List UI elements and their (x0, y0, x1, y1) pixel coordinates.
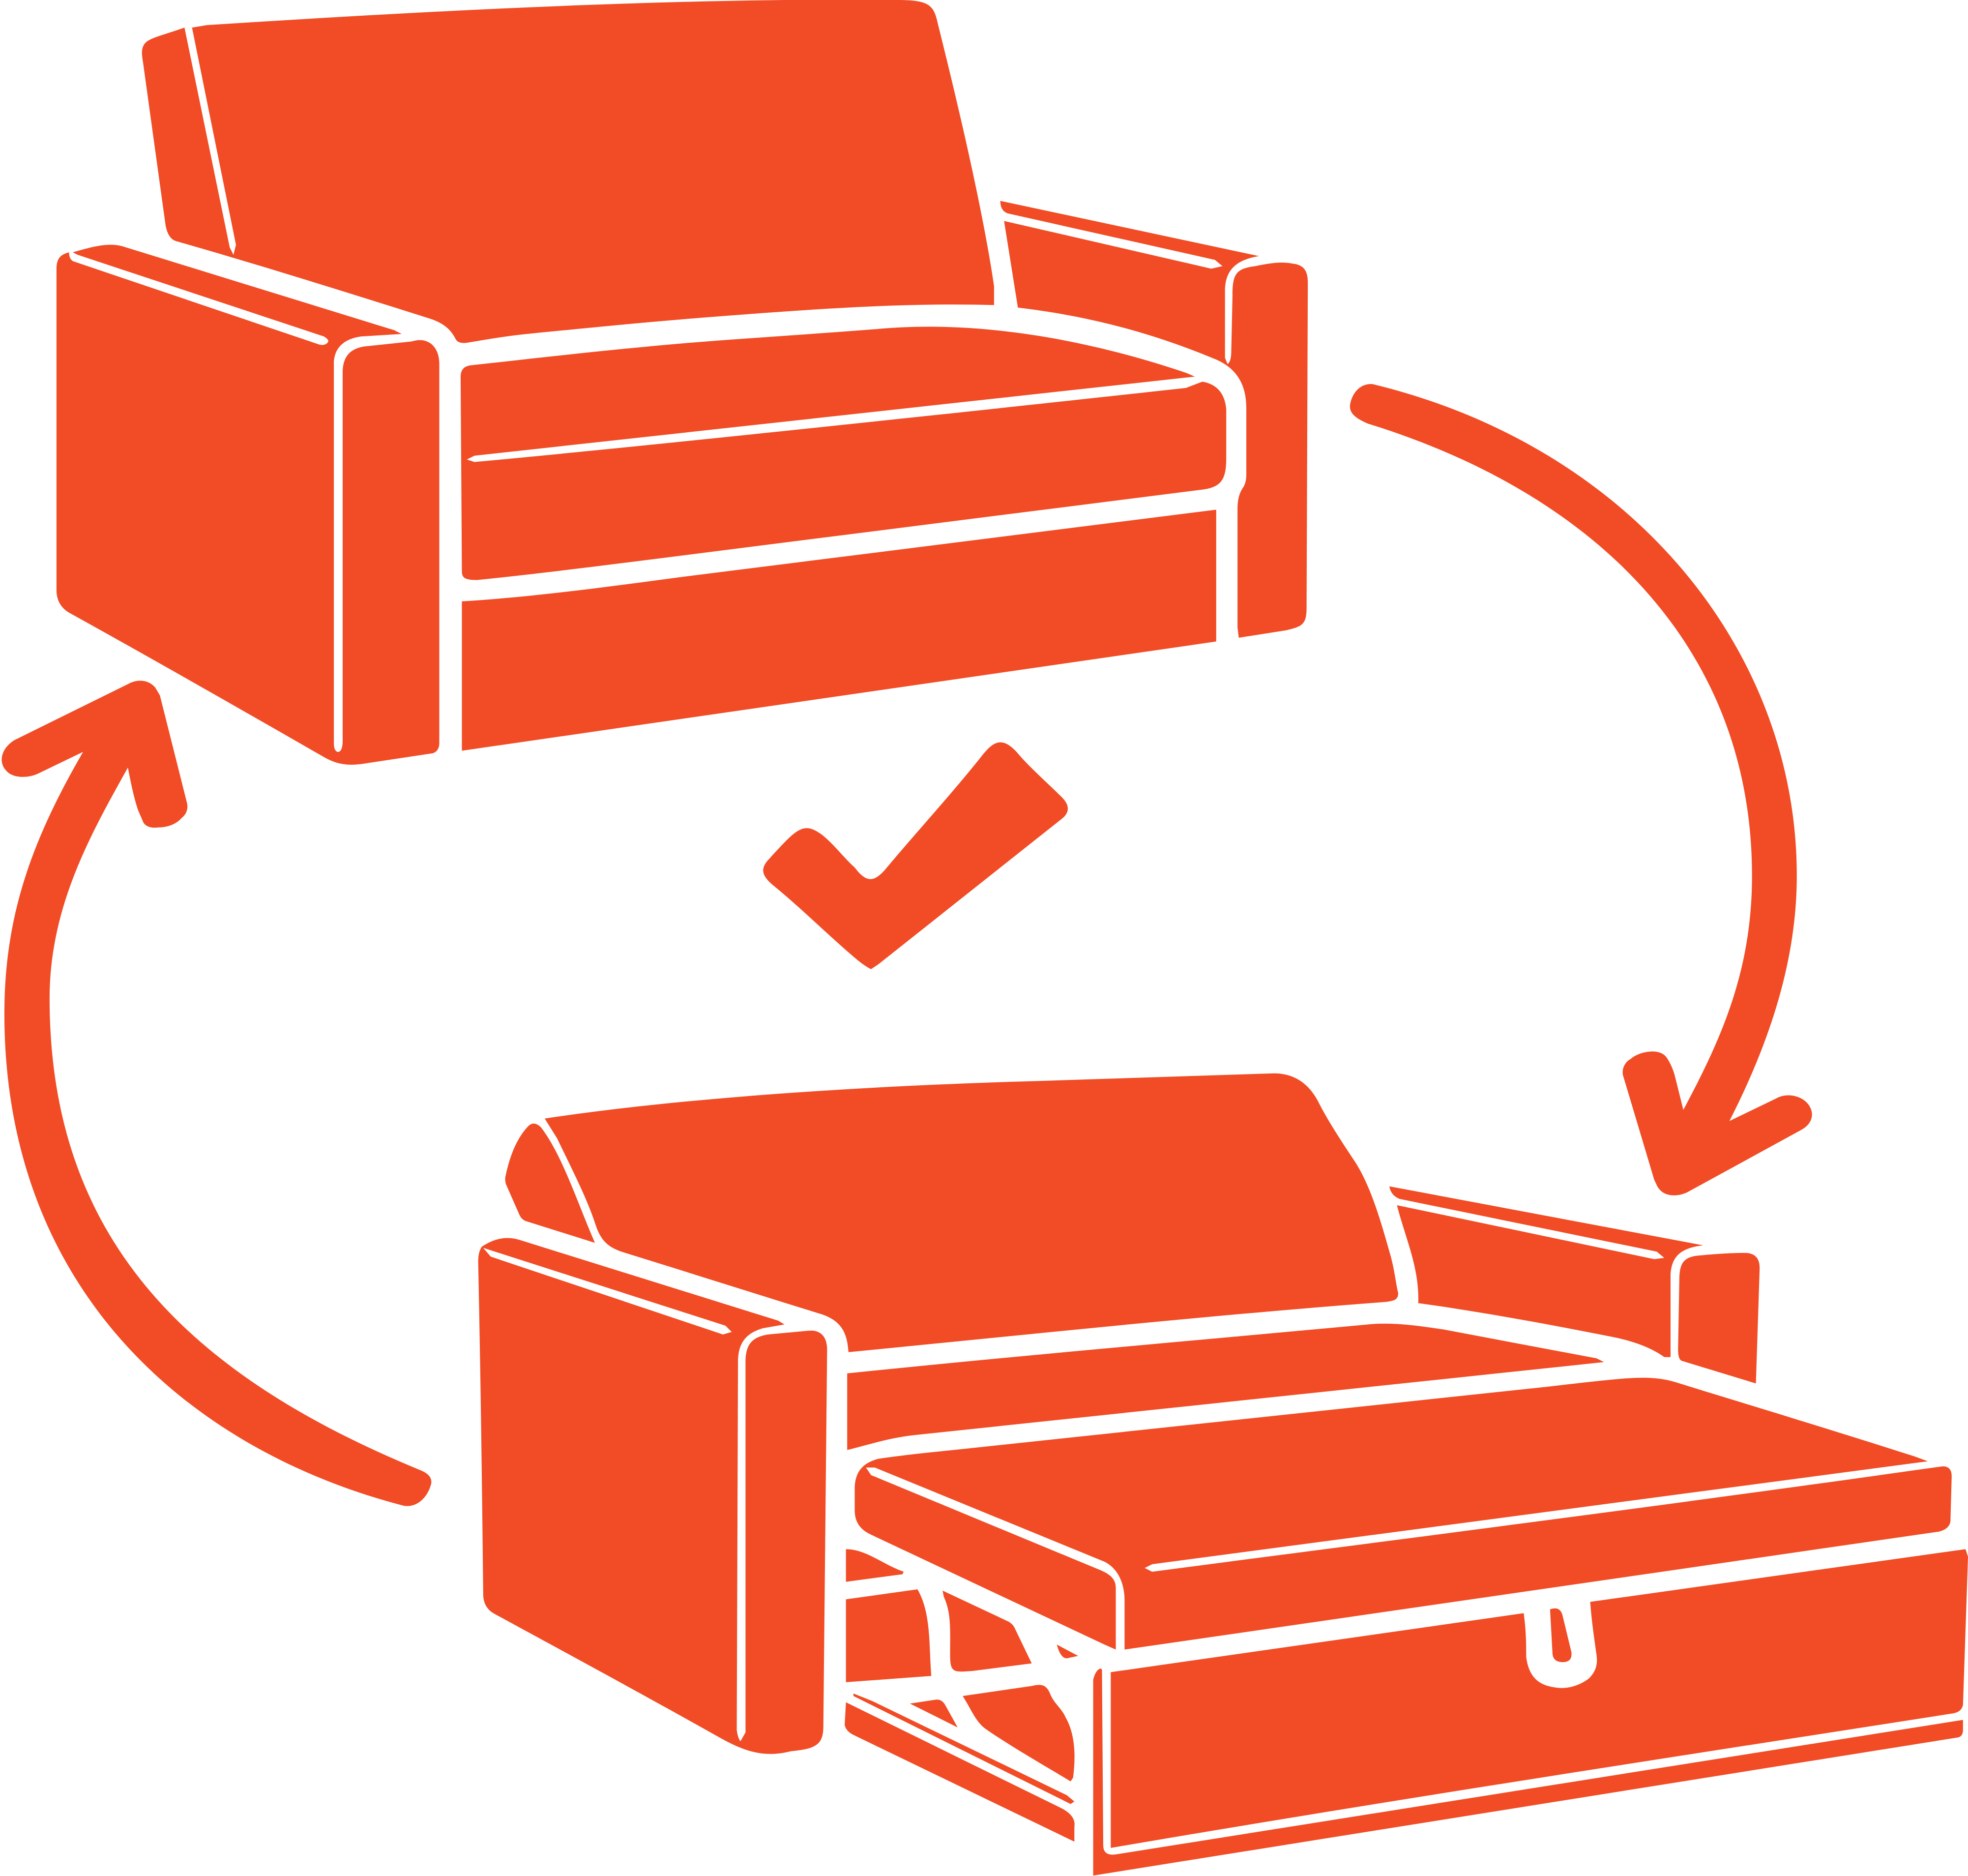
frame sliver (853, 1694, 1074, 1804)
front panel (1111, 1549, 1968, 1848)
backrest side wedge (505, 1124, 595, 1243)
backrest (545, 1073, 1398, 1352)
left arm (57, 245, 440, 765)
left arm slit (483, 1248, 732, 1335)
icon: check mark (763, 743, 1068, 969)
arrow: clockwise right (1350, 384, 1812, 1195)
icon: upright sofa (57, 0, 1308, 765)
frame piece 5 (963, 1685, 1075, 1782)
front base panel (462, 509, 1216, 751)
sofa back (142, 0, 994, 343)
front panel notch (1550, 1608, 1572, 1662)
mattress top (855, 1378, 1952, 1650)
frame piece 4 (1057, 1644, 1078, 1658)
right arm (1000, 201, 1308, 638)
frame piece 3 (942, 1591, 1032, 1671)
frame bottom rail (845, 1702, 1075, 1842)
seat cushion (461, 327, 1226, 580)
arrow: clockwise left (1, 681, 431, 1506)
sofa back slit (184, 28, 236, 255)
frame piece 2 (846, 1589, 931, 1682)
frame piece 6 (910, 1699, 958, 1727)
right arm cushion (1678, 1253, 1760, 1383)
right arm top (1389, 1187, 1703, 1357)
icon: unfolded sofa bed (478, 1073, 1968, 1876)
back cushion band (847, 1324, 1604, 1450)
left arm (478, 1238, 827, 1754)
base strip (1093, 1668, 1963, 1876)
frame piece 1 (846, 1549, 904, 1582)
